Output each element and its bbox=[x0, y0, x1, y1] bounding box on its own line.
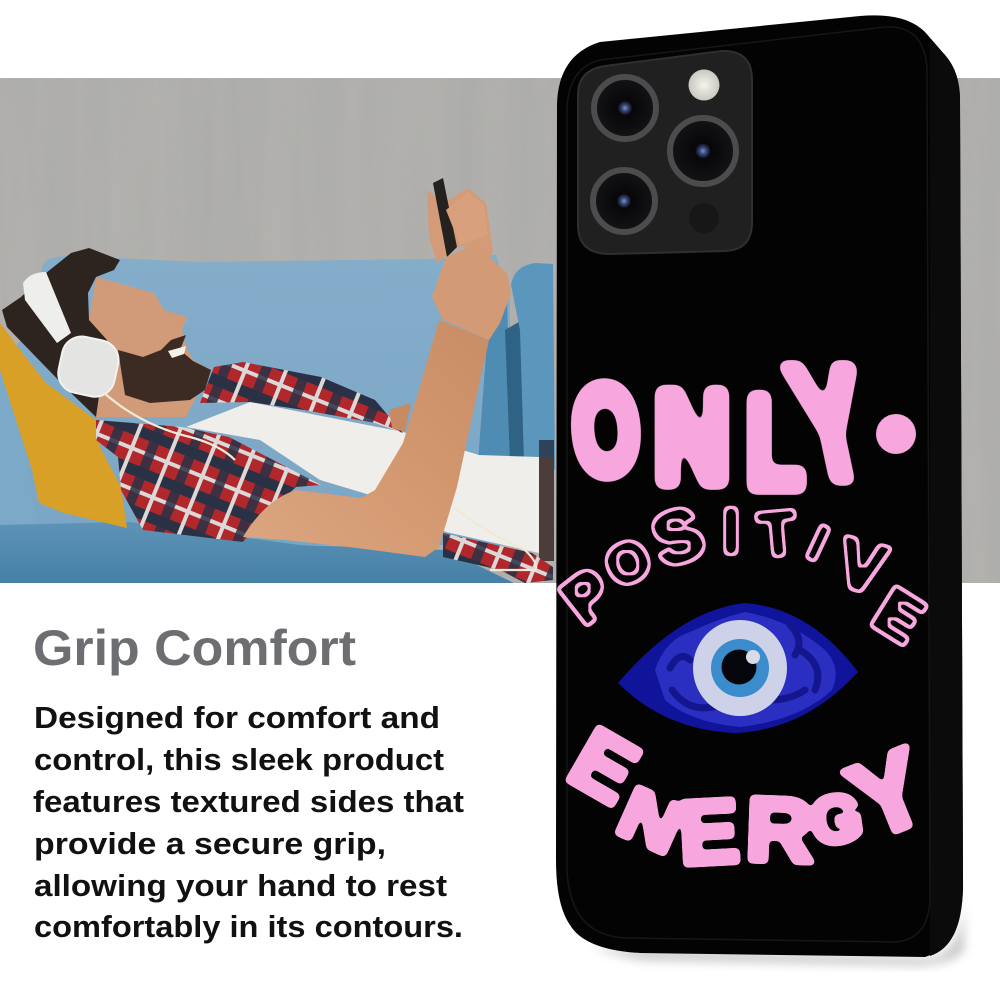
case inner edge bbox=[567, 27, 930, 942]
artwork: POSITIVE: E bbox=[861, 572, 937, 658]
artwork: POSITIVE: S bbox=[642, 489, 714, 584]
body text: provide a secure grip, bbox=[34, 826, 386, 861]
artwork: ENERGY: Y bbox=[832, 724, 944, 863]
artwork: ENERGY: R bbox=[744, 778, 816, 882]
headphone cable bbox=[103, 392, 536, 570]
body text bbox=[33, 700, 464, 944]
body text: features textured sides that bbox=[33, 784, 464, 819]
beard bbox=[118, 335, 211, 403]
artwork: POSITIVE: V bbox=[829, 522, 895, 610]
hair bbox=[2, 248, 120, 417]
case side wall bbox=[930, 40, 963, 956]
mustard cushion bbox=[0, 323, 127, 528]
artwork: ONLY: O bbox=[568, 359, 644, 502]
artwork: evil eye bbox=[618, 603, 858, 733]
headphone band bbox=[23, 272, 71, 343]
lens bottom left bbox=[593, 170, 655, 232]
dot bbox=[876, 414, 916, 454]
artwork: POSITIVE: O bbox=[595, 525, 661, 600]
artwork: POSITIVE: I bbox=[722, 495, 740, 567]
flash bbox=[688, 70, 720, 100]
phone case bbox=[547, 15, 964, 965]
jeans and belt bbox=[539, 440, 554, 561]
heading: Grip Comfort bbox=[33, 620, 356, 676]
artwork: ONLY: N bbox=[654, 364, 730, 510]
upper hand bbox=[427, 188, 493, 263]
neck and face bbox=[86, 277, 211, 417]
artwork: ENERGY: E bbox=[554, 708, 654, 823]
phone shadow bbox=[590, 900, 964, 965]
artwork: ENERGY: E bbox=[676, 781, 742, 885]
artwork: ENERGY: N bbox=[607, 772, 694, 869]
sofa bbox=[0, 255, 555, 583]
camera module bbox=[578, 51, 752, 254]
smile bbox=[168, 346, 186, 358]
man bbox=[2, 178, 554, 583]
fingers front bbox=[446, 192, 488, 245]
artwork: POSITIVE: I bbox=[800, 515, 836, 571]
body text: control, this sleek product bbox=[34, 742, 444, 777]
artwork: ENERGY: G bbox=[806, 779, 867, 859]
lens right bbox=[670, 118, 736, 184]
artwork: ENERGY bbox=[554, 708, 944, 885]
body text: comfortably in its contours. bbox=[34, 909, 463, 944]
artwork: POSITIVE bbox=[547, 489, 937, 658]
artwork: ONLY: L bbox=[746, 369, 804, 515]
wall background bbox=[0, 78, 1000, 583]
plaid shirt bbox=[96, 362, 553, 583]
artwork: POSITIVE: T bbox=[755, 498, 799, 571]
artwork: ONLY bbox=[568, 335, 916, 515]
artwork: POSITIVE: P bbox=[547, 553, 627, 639]
body text: Designed for comfort and bbox=[34, 700, 440, 735]
far arm bbox=[389, 403, 411, 432]
phone in hand bbox=[433, 178, 457, 257]
lens top left bbox=[594, 77, 656, 139]
t-shirt bbox=[186, 402, 539, 553]
lifestyle photo bbox=[0, 78, 1000, 583]
artwork: ONLY: Y bbox=[776, 335, 884, 513]
lower hand bbox=[432, 245, 511, 340]
arm bbox=[243, 320, 489, 557]
microphone bbox=[689, 203, 719, 233]
body text: allowing your hand to rest bbox=[34, 868, 447, 903]
headphone ear cup bbox=[55, 333, 122, 400]
case body bbox=[556, 15, 963, 957]
